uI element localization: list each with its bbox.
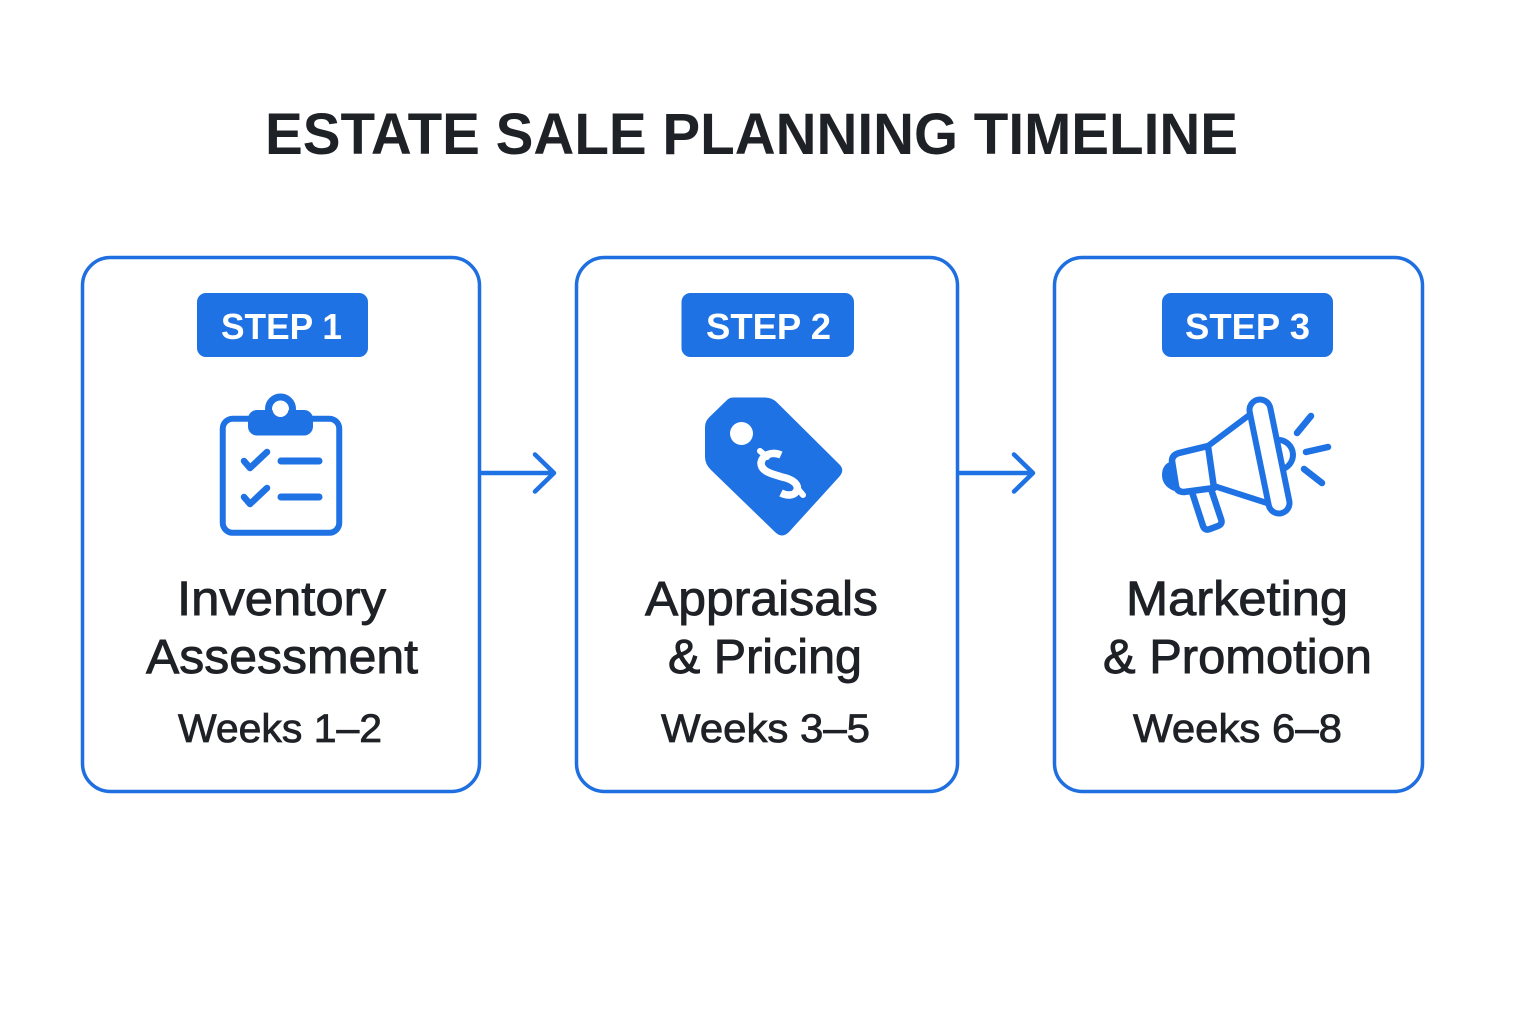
badge: step 1: STEP 1 bbox=[221, 306, 342, 347]
badge: step 3: STEP 3 bbox=[1185, 306, 1310, 347]
heading: inventory assessment: Inventory bbox=[177, 573, 386, 626]
panel: step 3 marketing and promotion bbox=[1054, 258, 1422, 792]
badge: step 3 bbox=[1162, 293, 1333, 357]
arrow: step 1 to step 2 bbox=[482, 454, 554, 492]
duration: weeks 6-8: Weeks 6–8 bbox=[1133, 707, 1342, 751]
duration: weeks 1-2: Weeks 1–2 bbox=[178, 707, 382, 751]
icon: price tag with dollar sign bbox=[705, 398, 842, 536]
heading: marketing and promotion bbox=[1103, 573, 1372, 684]
heading: inventory assessment bbox=[146, 573, 418, 684]
heading: inventory assessment: Assessment bbox=[146, 631, 418, 684]
badge: step 1 bbox=[197, 293, 368, 357]
heading: appraisals and pricing bbox=[645, 573, 878, 684]
duration: weeks 3-5: Weeks 3–5 bbox=[661, 707, 870, 751]
panel: step 1 inventory assessment bbox=[82, 258, 480, 792]
badge: step 2: STEP 2 bbox=[706, 306, 831, 347]
title: ESTATE SALE PLANNING TIMELINE bbox=[265, 102, 1238, 167]
icon: megaphone bbox=[1162, 410, 1328, 530]
badge: step 2 bbox=[682, 293, 854, 357]
icon: clipboard checklist bbox=[223, 397, 339, 533]
panel: step 2 appraisals and pricing bbox=[576, 258, 958, 792]
heading: appraisals and pricing: & Pricing bbox=[668, 631, 862, 684]
heading: appraisals and pricing: Appraisals bbox=[645, 573, 878, 626]
arrow: step 2 to step 3 bbox=[960, 454, 1033, 492]
heading: marketing and promotion: Marketing bbox=[1126, 573, 1348, 626]
heading: marketing and promotion: & Promotion bbox=[1103, 631, 1372, 684]
